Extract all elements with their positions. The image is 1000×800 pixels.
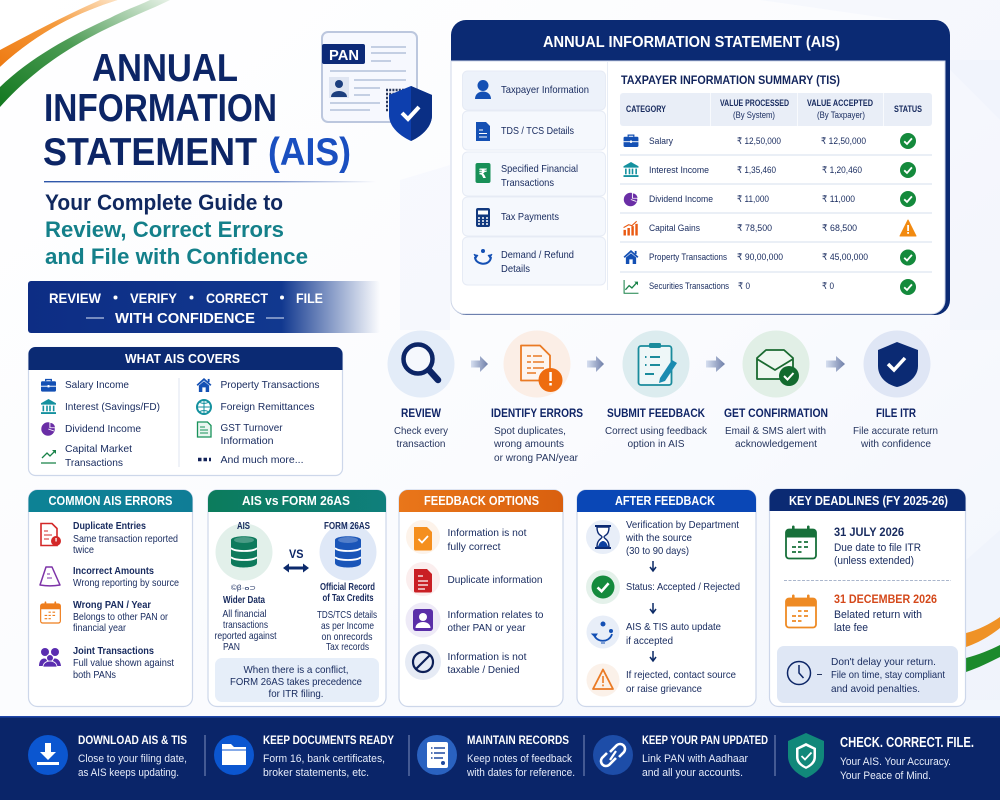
title: (AIS) xyxy=(268,131,351,174)
item: joint transactions: Joint Transactions xyxy=(73,646,154,657)
step: status: Status: Accepted / Rejected xyxy=(626,581,740,593)
step: review: transaction xyxy=(396,438,446,450)
table: TIS summary: STATUS xyxy=(894,104,922,114)
step: submit feedback xyxy=(605,330,708,450)
item: joint transactions: both PANs xyxy=(73,670,116,681)
title: INFORMATION xyxy=(44,87,277,130)
row: property transactions: Property Transactions xyxy=(649,252,727,263)
callout: don't delay: File on time, stay compliant xyxy=(831,669,945,681)
step: auto update: AIS & TIS auto update xyxy=(626,621,721,633)
column: AIS: transactions xyxy=(223,620,268,631)
item: wrong PAN / year: Belongs to other PAN or xyxy=(73,612,169,623)
option: other PAN or year: other PAN or year xyxy=(448,622,526,634)
panel: AIS vs Form 26AS xyxy=(208,490,386,706)
panel: what AIS covers: Salary Income xyxy=(65,379,129,391)
row: securities transactions: Securities Transactions xyxy=(649,281,729,292)
item: duplicate entries: Duplicate Entries xyxy=(73,521,146,532)
tip: keep documents ready: broker statements, etc. xyxy=(263,767,369,779)
column: AIS xyxy=(214,521,277,653)
banner: review verify correct file: REVIEW xyxy=(49,290,102,306)
step: identify errors: Spot duplicates, xyxy=(494,425,566,437)
step: verification: with the source xyxy=(625,532,692,544)
footer band xyxy=(0,716,1000,800)
column: Form 26AS: on onrecords xyxy=(322,632,372,643)
row: interest income: Interest Income xyxy=(649,165,709,176)
item: joint transactions xyxy=(39,646,174,681)
sidebar menu xyxy=(462,71,606,285)
option: not fully correct: Information is not xyxy=(448,527,527,539)
row: dividend income xyxy=(624,191,916,207)
column: AIS: All financial xyxy=(222,609,266,620)
tip: maintain records: MAINTAIN RECORDS xyxy=(467,733,569,747)
tip: download AIS and TIS: as AIS keeps updating. xyxy=(78,767,179,779)
arrow down xyxy=(650,651,656,661)
tricolor ribbon top left xyxy=(0,0,170,107)
column: Form 26AS: Tax records xyxy=(326,642,369,653)
table: TIS summary: VALUE PROCESSED xyxy=(720,98,789,108)
column: AIS: Wider Data xyxy=(223,595,265,606)
item: incorrect amounts xyxy=(40,566,179,589)
step: identify errors xyxy=(491,330,583,464)
column: Form 26AS: FORM 26AS xyxy=(324,521,370,532)
subtitle xyxy=(45,190,308,269)
tip: keep PAN updated: KEEP YOUR PAN UPDATED xyxy=(642,733,768,747)
column: Form 26AS: as per Income xyxy=(321,621,374,632)
sidebar menu: ₹ xyxy=(478,166,488,181)
panel: what AIS covers: WHAT AIS COVERS xyxy=(125,351,240,366)
background: faint building shapes xyxy=(400,0,1000,700)
tagline: check correct file: Your AIS. Your Accuracy. xyxy=(840,756,951,768)
step: auto update: if accepted xyxy=(626,635,673,647)
option: other PAN or year: Information relates to xyxy=(448,609,544,621)
panel: common AIS errors: COMMON AIS ERRORS xyxy=(48,493,173,508)
step: review: Check every xyxy=(394,425,449,437)
step: get confirmation: acknowledgement xyxy=(735,438,817,450)
column: Form 26AS xyxy=(317,521,377,653)
deadline: 31 July 2026: Due date to file ITR xyxy=(834,542,921,554)
row: interest income: ₹ 1,35,460 xyxy=(737,165,776,176)
sidebar menu: Specified Financial xyxy=(501,163,578,175)
callout: form 26AS precedence: FORM 26AS takes precedence xyxy=(230,676,362,688)
panel: what AIS covers: Capital Market xyxy=(65,443,132,455)
row: property transactions: ₹ 90,00,000 xyxy=(737,252,783,263)
column: AIS: AIS xyxy=(237,521,250,532)
step: submit feedback: SUBMIT FEEDBACK xyxy=(607,406,705,420)
step: review: REVIEW xyxy=(401,406,442,420)
column: Form 26AS: Official Record xyxy=(320,582,375,593)
row: securities transactions: ₹ 0 xyxy=(738,281,750,292)
step: verification: (30 to 90 days) xyxy=(626,545,689,557)
deadline: 31 December 2026: 31 DECEMBER 2026 xyxy=(834,592,937,606)
banner: review verify correct file xyxy=(28,281,380,333)
column: Form 26AS: TDS/TCS details xyxy=(317,610,377,621)
tagline: check correct file xyxy=(788,733,974,782)
panel: what AIS covers: Dividend Income xyxy=(65,423,141,435)
row: dividend income: ₹ 11,000 xyxy=(822,194,855,205)
tip: download AIS and TIS: Close to your filing date, xyxy=(78,753,187,765)
option: duplicate information: Duplicate information xyxy=(448,574,543,586)
item: wrong PAN / year xyxy=(41,600,169,634)
panel: key deadlines xyxy=(770,489,966,706)
tip: keep documents ready xyxy=(214,733,394,779)
panel: after feedback xyxy=(577,490,756,706)
option: not taxable: taxable / Denied xyxy=(448,664,520,676)
tricolor ribbon right xyxy=(966,617,1000,672)
panel: feedback options xyxy=(399,490,563,706)
row: interest income xyxy=(624,162,916,178)
step: file ITR: FILE ITR xyxy=(876,406,916,420)
panel: what AIS covers xyxy=(28,347,342,476)
arrow xyxy=(471,356,488,372)
table: TIS summary: VALUE ACCEPTED xyxy=(807,98,873,108)
row: capital gains: ₹ 78,500 xyxy=(737,223,772,234)
callout: form 26AS precedence xyxy=(215,658,379,702)
option: not taxable xyxy=(405,644,527,680)
tip: keep PAN updated: and all your accounts. xyxy=(642,767,743,779)
sidebar menu: Demand / Refund xyxy=(501,249,574,261)
callout: form 26AS precedence: for ITR filing. xyxy=(268,688,324,700)
panel: after feedback: AFTER FEEDBACK xyxy=(615,493,716,508)
tip: maintain records: Keep notes of feedback xyxy=(467,753,572,765)
step: submit feedback: option in AIS xyxy=(628,438,684,450)
step: auto update xyxy=(586,616,721,648)
step: verification: Verification by Department xyxy=(626,519,739,531)
step: review xyxy=(388,330,454,450)
tip: keep PAN updated xyxy=(593,733,768,779)
sidebar menu: TDS / TCS Details xyxy=(501,125,574,137)
item: incorrect amounts: Incorrect Amounts xyxy=(73,566,154,577)
panel: feedback options: FEEDBACK OPTIONS xyxy=(424,493,539,508)
panel: what AIS covers: Information xyxy=(220,435,274,447)
column: AIS: PAN xyxy=(223,642,240,653)
callout: form 26AS precedence: When there is a conflict, xyxy=(244,664,348,676)
step: identify errors: wrong amounts xyxy=(493,438,564,450)
step: file ITR: with confidence xyxy=(860,438,931,450)
item: wrong PAN / year: Wrong PAN / Year xyxy=(73,600,151,611)
panel: what AIS covers: GST Turnover xyxy=(220,422,283,434)
row: salary xyxy=(624,133,916,149)
option: other PAN or year xyxy=(406,602,544,638)
step: get confirmation: GET CONFIRMATION xyxy=(724,406,828,420)
column: Form 26AS: of Tax Credits xyxy=(322,593,374,604)
sidebar menu: Tax Payments xyxy=(501,211,559,223)
item: duplicate entries: twice xyxy=(73,545,94,556)
item: duplicate entries xyxy=(41,521,178,556)
deadline: 31 December 2026: Belated return with xyxy=(834,609,922,621)
icon: PAN card with shield xyxy=(322,32,432,141)
table: TIS summary: (By System) xyxy=(733,110,775,120)
arrow xyxy=(826,356,845,372)
arrow down xyxy=(650,561,656,571)
banner: review verify correct file: CORRECT xyxy=(206,290,268,306)
icon: PAN card with shield: PAN xyxy=(329,47,359,64)
row: property transactions: ₹ 45,00,000 xyxy=(822,252,868,263)
heading: taxpayer information summary: TAXPAYER INFORMATION SUMMARY (TIS) xyxy=(621,73,840,87)
step: verification xyxy=(586,519,739,557)
row: capital gains: ₹ 68,500 xyxy=(822,223,857,234)
tip: maintain records xyxy=(417,733,575,779)
item: duplicate entries: Same transaction reported xyxy=(73,534,178,545)
banner: review verify correct file: VERIFY xyxy=(130,290,178,306)
deadline: 31 December 2026: late fee xyxy=(834,622,868,634)
banner: review verify correct file: WITH CONFIDENCE xyxy=(115,311,255,327)
item: incorrect amounts: Wrong reporting by source xyxy=(73,578,179,589)
tip: download AIS and TIS: DOWNLOAD AIS & TIS xyxy=(78,733,187,747)
title xyxy=(43,47,351,174)
row: securities transactions: ₹ 0 xyxy=(822,281,834,292)
deadline: 31 July 2026: (unless extended) xyxy=(834,555,914,567)
sidebar menu: Taxpayer Information xyxy=(501,84,589,96)
row: dividend income: Dividend Income xyxy=(649,194,713,205)
sidebar menu: Transactions xyxy=(501,177,554,189)
subtitle: Review, Correct Errors xyxy=(45,217,284,242)
arrow xyxy=(706,356,725,372)
deadline: 31 July 2026: 31 JULY 2026 xyxy=(834,525,904,539)
subtitle: and File with Confidence xyxy=(45,244,308,269)
row: property transactions xyxy=(624,250,916,266)
callout: don't delay xyxy=(777,646,958,703)
panel: what AIS covers: Foreign Remittances xyxy=(220,401,314,413)
panel: what AIS covers: Transactions xyxy=(65,457,123,469)
step: get confirmation xyxy=(724,330,828,450)
deadline: 31 July 2026 xyxy=(786,525,921,567)
table: TIS summary: CATEGORY xyxy=(626,104,666,114)
column: AIS: ©ꞵ·ⴰ⊃ xyxy=(231,584,256,592)
deadline: 31 December 2026 xyxy=(786,592,937,634)
table: TIS summary: (By Taxpayer) xyxy=(817,110,865,120)
title: STATEMENT xyxy=(43,131,257,174)
title: ANNUAL xyxy=(92,47,238,90)
row: securities transactions xyxy=(624,279,916,295)
tagline: check correct file: Your Peace of Mind. xyxy=(840,770,931,782)
sidebar menu: Details xyxy=(501,263,530,275)
process: five steps xyxy=(388,330,938,464)
option: not taxable: Information is not xyxy=(448,651,527,663)
step: if rejected: If rejected, contact source xyxy=(626,669,736,681)
panel: what AIS covers: Interest (Savings/FD) xyxy=(65,401,160,413)
panel: what AIS covers: Property Transactions xyxy=(220,379,320,391)
column: AIS: reported against xyxy=(214,631,277,642)
step: if rejected: or raise grievance xyxy=(626,683,702,695)
item: joint transactions: Full value shown against xyxy=(73,658,174,669)
tip: keep documents ready: KEEP DOCUMENTS READY xyxy=(263,733,394,747)
tip: keep documents ready: Form 16, bank certificates, xyxy=(263,753,385,765)
step: status xyxy=(586,570,740,604)
panel: AIS vs Form 26AS: AIS vs FORM 26AS xyxy=(242,493,350,508)
arrow xyxy=(587,356,604,372)
step: if rejected xyxy=(586,664,736,696)
row: salary: ₹ 12,50,000 xyxy=(821,136,866,147)
panel: AIS statement window xyxy=(451,20,950,315)
table: TIS summary xyxy=(620,93,932,295)
tip: download AIS and TIS xyxy=(28,733,187,779)
subtitle: Your Complete Guide to xyxy=(45,190,283,215)
panel: key deadlines: KEY DEADLINES (FY 2025-26) xyxy=(789,493,948,508)
row: interest income: ₹ 1,20,460 xyxy=(822,165,862,176)
step: identify errors: IDENTIFY ERRORS xyxy=(491,406,583,420)
step: identify errors: or wrong PAN/year xyxy=(494,452,578,464)
row: capital gains xyxy=(624,220,916,236)
vs with double arrow: VS xyxy=(289,547,304,561)
option: not fully correct xyxy=(406,520,527,554)
row: dividend income: ₹ 11,000 xyxy=(737,194,769,205)
step: file ITR: File accurate return xyxy=(853,425,938,437)
item: wrong PAN / year: financial year xyxy=(73,623,127,634)
row: salary: ₹ 12,50,000 xyxy=(737,136,781,147)
callout: don't delay: Don't delay your return. xyxy=(831,656,936,668)
callout: don't delay: and avoid penalties. xyxy=(831,683,920,695)
step: file ITR xyxy=(853,330,938,450)
step: submit feedback: Correct using feedback xyxy=(605,425,708,437)
banner: review verify correct file: FILE xyxy=(296,290,323,306)
arrow down xyxy=(650,603,656,613)
vs with double arrow xyxy=(283,547,309,572)
option: not fully correct: fully correct xyxy=(448,541,501,553)
row: salary: Salary xyxy=(649,136,673,147)
row: capital gains: Capital Gains xyxy=(649,223,700,234)
tip: maintain records: with dates for reference. xyxy=(466,767,575,779)
tip: keep PAN updated: Link PAN with Aadhaar xyxy=(642,753,748,765)
step: get confirmation: Email & SMS alert with xyxy=(725,425,826,437)
option: duplicate information xyxy=(406,562,543,596)
panel: common AIS errors xyxy=(28,490,192,706)
heading: AIS statement: ANNUAL INFORMATION STATEMENT (AIS) xyxy=(543,34,840,51)
panel: what AIS covers: And much more... xyxy=(220,454,304,466)
